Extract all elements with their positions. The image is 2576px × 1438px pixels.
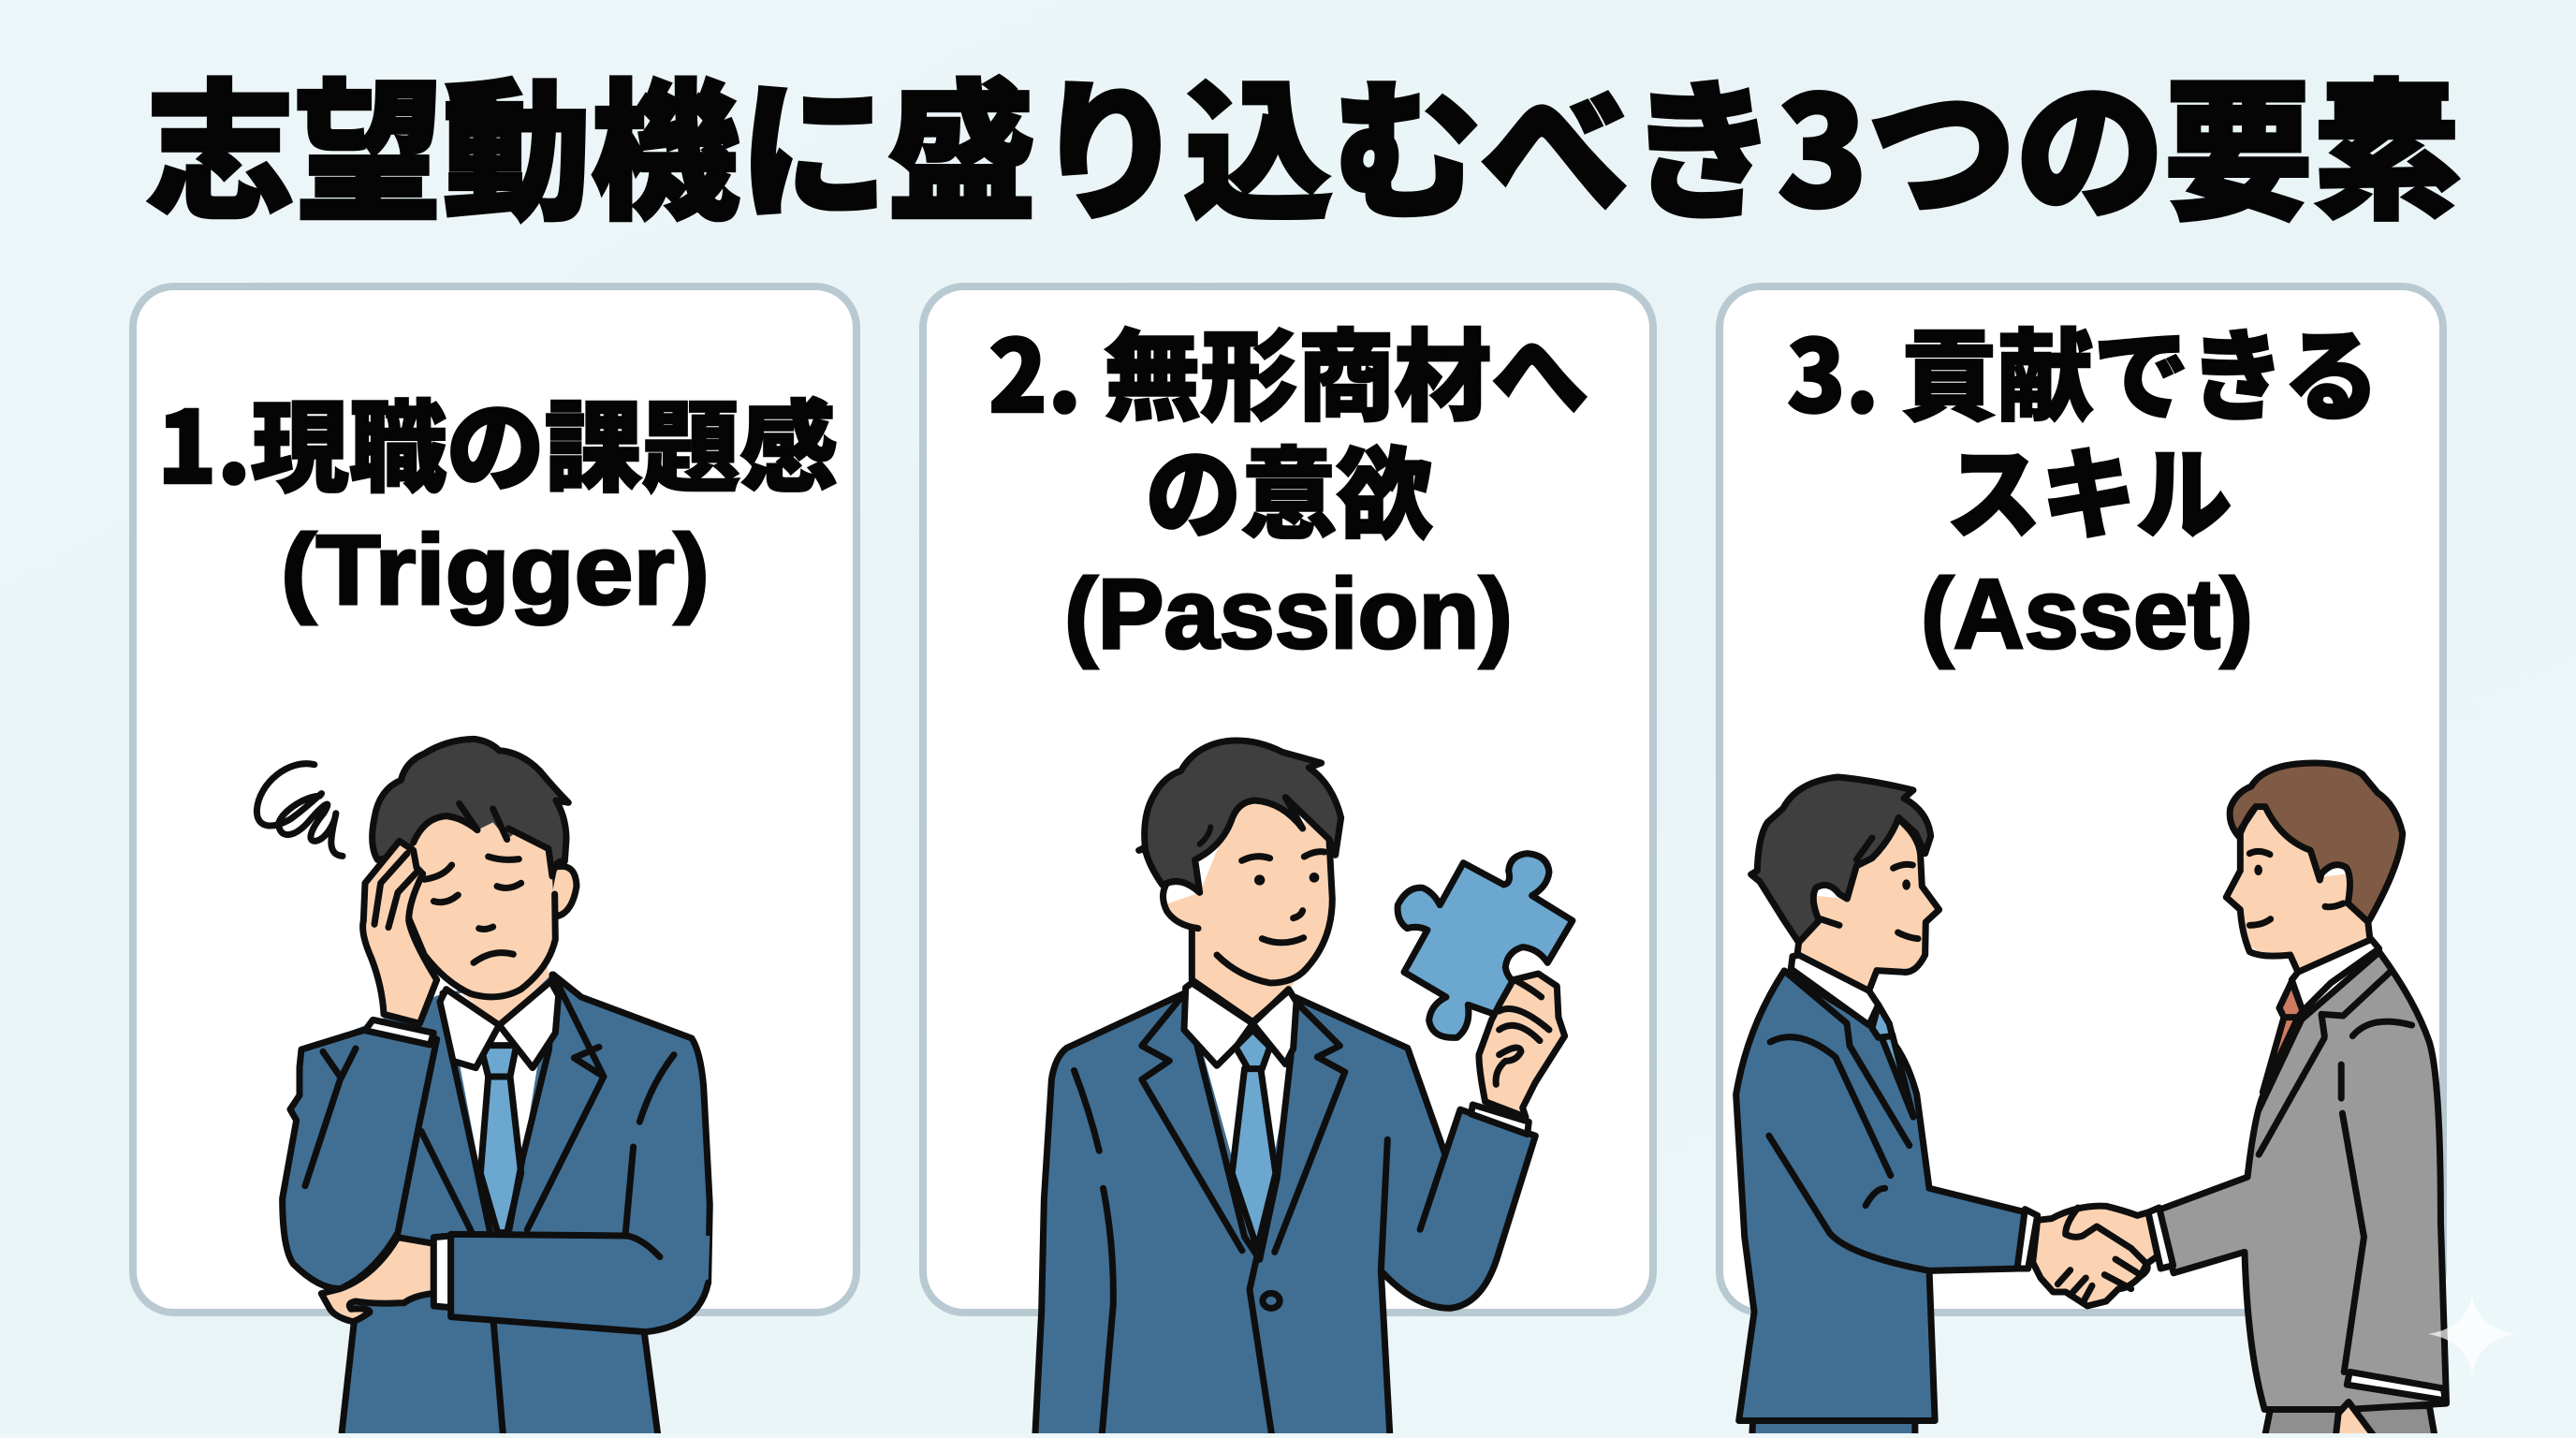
icon: dizzy swirl: [256, 764, 343, 856]
right man hair: [2230, 763, 2403, 922]
face details: [1254, 874, 1265, 886]
heading: card 2: 2. 無形商材へ: [988, 297, 1588, 441]
heading: card 3: (Asset): [1921, 559, 2253, 669]
left suit seams: [1769, 971, 1929, 1270]
illustration: worried businessman: [256, 739, 710, 1434]
heading: card 1: [157, 368, 838, 625]
wrist cuff: [433, 1236, 451, 1308]
panel: card 1 trigger: [133, 286, 856, 1313]
forearm and hand: [321, 1238, 433, 1322]
illustration: businessmen shaking hands: [1736, 763, 2447, 1438]
right man face outline: [2226, 807, 2370, 972]
right man head: [2226, 763, 2412, 1093]
right man suit and trousers: [2157, 952, 2447, 1438]
tie: [1232, 1068, 1276, 1248]
sleeve cuff: [365, 1020, 433, 1045]
hair: [1139, 741, 1341, 892]
head and hand: [1139, 741, 1573, 1135]
bottom edge band: [0, 1433, 2576, 1438]
icon: puzzle piece: [1398, 854, 1573, 1037]
left man head: [1751, 777, 1939, 1037]
heading: card 2: の意欲: [1146, 415, 1432, 559]
left man face details: [1902, 879, 1910, 890]
right man collar: [2291, 939, 2379, 1011]
left man face outline: [1797, 819, 1939, 990]
ear: [1163, 881, 1200, 929]
crossed arm: [451, 1234, 710, 1332]
suit seams: [1074, 1070, 1445, 1438]
face: [407, 816, 555, 997]
left man suit and trousers: [1736, 971, 2028, 1438]
handshake: [2017, 1206, 2174, 1306]
title: 志望動機に盛り込むべき3つの要素: [146, 32, 2461, 250]
face details: [424, 857, 521, 962]
heading: card 2: [988, 297, 1588, 669]
heading: card 2: (Passion): [1064, 559, 1513, 669]
left handshake cuff: [2017, 1210, 2038, 1269]
heading: card 3: [1787, 297, 2379, 669]
left man collar: [1791, 955, 1879, 1025]
head: [363, 739, 577, 1068]
hand on head: [363, 841, 437, 1023]
right cuff: [2347, 1372, 2445, 1401]
neck and face skin: [1164, 803, 1332, 1022]
body: torso and shoulders: [301, 975, 710, 1434]
cuff: [1471, 1105, 1529, 1135]
icon: sparkle watermark: [2428, 1294, 2516, 1376]
heading: card 3: 3. 貢献できる: [1787, 297, 2379, 441]
collar: [1184, 983, 1252, 1065]
left man hair: [1751, 777, 1931, 943]
illustration: businessman with puzzle piece: [1035, 741, 1573, 1438]
right man tie: [2262, 981, 2303, 1093]
raised arm sleeve: [283, 1020, 710, 1332]
button: [1263, 1293, 1280, 1308]
heading: card 3: スキル: [1946, 415, 2232, 559]
hand: [1479, 974, 1565, 1117]
shirt: [1189, 1001, 1295, 1248]
heading: card 1: 1.現職の課題感: [157, 368, 838, 512]
ear: [546, 866, 577, 916]
hair: [373, 739, 568, 883]
neck and collar: [446, 958, 549, 1025]
tie knot: [1236, 1030, 1270, 1069]
shirt: [446, 993, 549, 1231]
body: suit: [1035, 993, 1535, 1438]
right man face details: [2254, 865, 2262, 875]
right lower hand: [2335, 1402, 2376, 1438]
tie: [480, 1046, 521, 1233]
lapels: [1187, 1001, 1295, 1259]
left man tie: [1872, 1005, 1893, 1037]
face outline: [1192, 840, 1332, 1022]
heading: card 1: (Trigger): [281, 515, 710, 625]
right handshake cuff: [2148, 1208, 2174, 1269]
right suit seams: [2259, 1020, 2364, 1372]
lapels and seams: [421, 975, 674, 1233]
panel: card 2 passion: [923, 286, 1653, 1313]
panel: card 3 asset: [1720, 286, 2443, 1313]
